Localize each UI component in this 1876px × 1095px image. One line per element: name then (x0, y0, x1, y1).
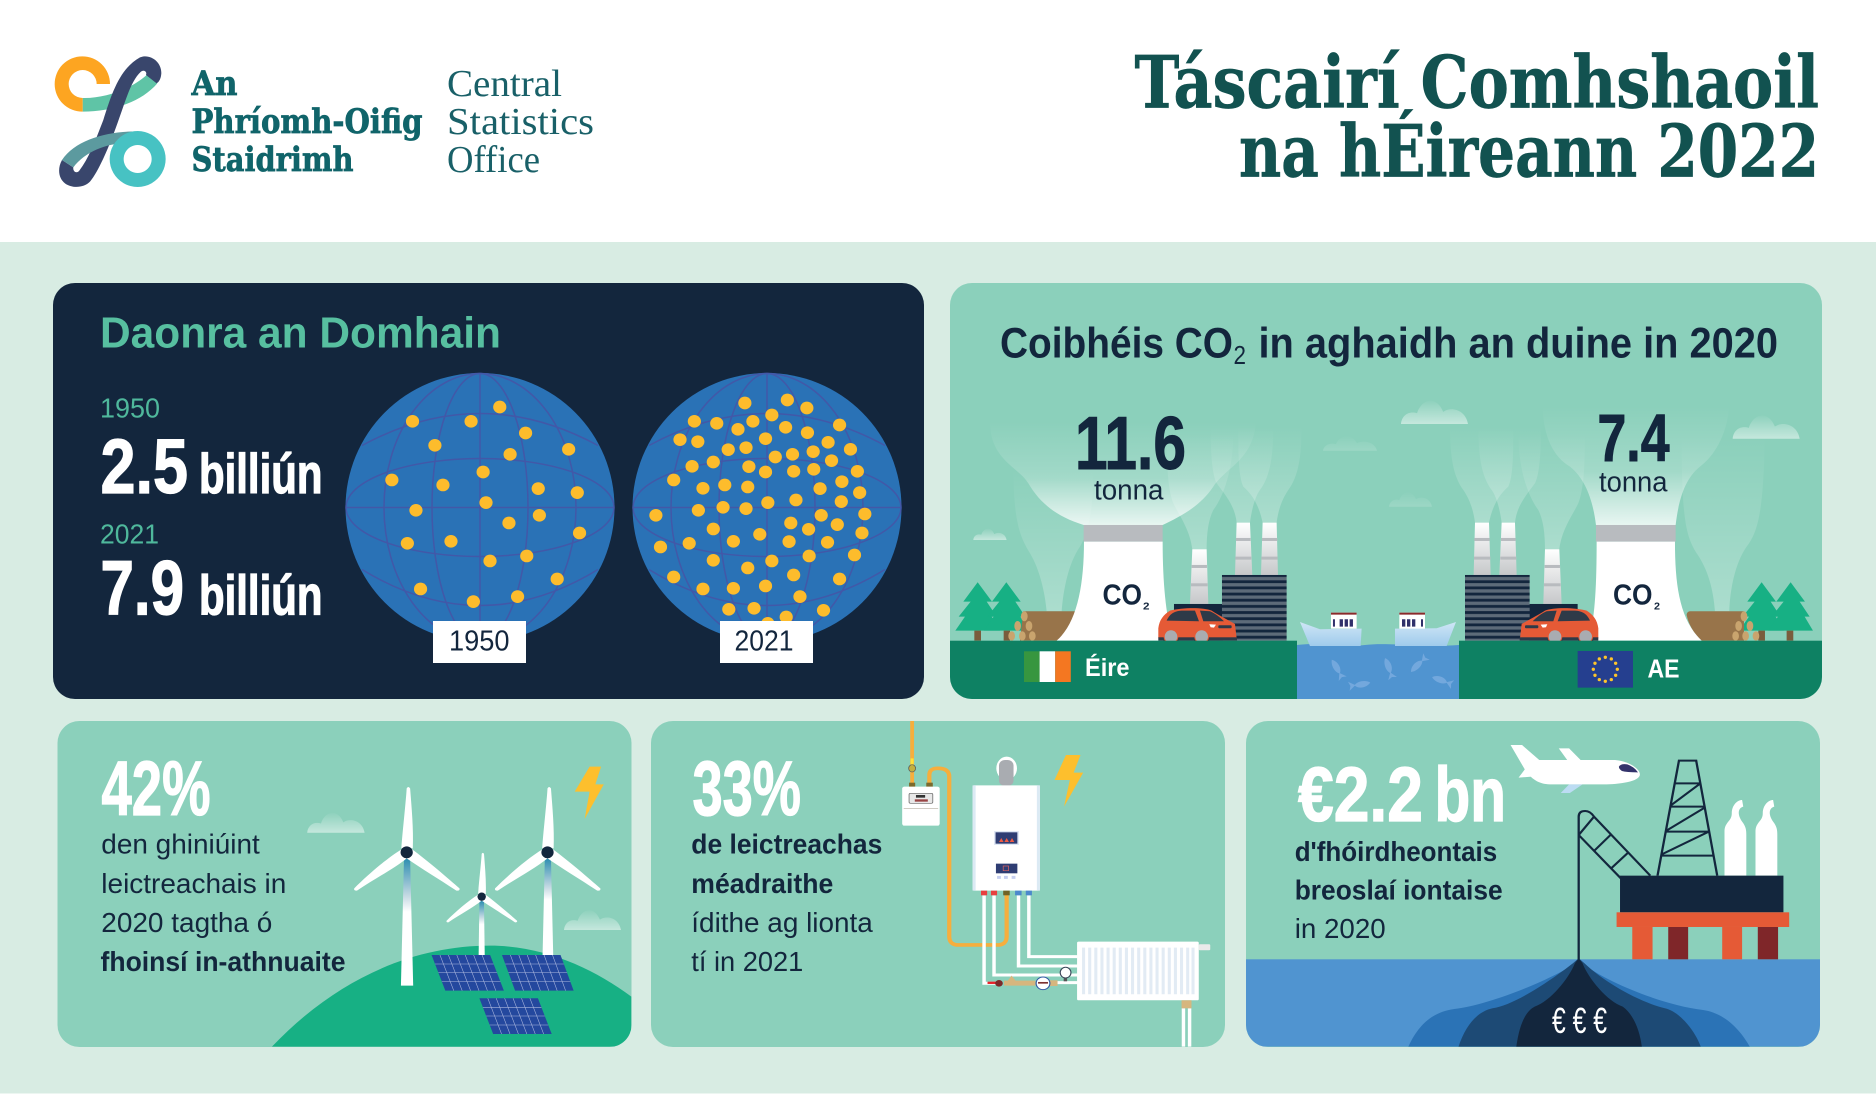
globe 1950 with population dots (346, 373, 614, 642)
stat: EU 7.4 tonnes: 7.4 (1598, 401, 1670, 476)
stat: 2021 population: 2021 (100, 518, 159, 550)
text: subsidies description (1295, 836, 1503, 944)
stat: 33%: 33% (692, 746, 801, 832)
label 2021: 2021 (734, 626, 794, 658)
heading: CO2 per person (1000, 320, 1778, 370)
panel: renewable electricity (58, 721, 632, 1047)
tower label: Ireland CO2: 2 (1143, 602, 1150, 612)
logo text: Irish: Staidrimh (192, 140, 354, 180)
stat: 1950 population: 1950 (100, 392, 160, 424)
scene: EU emissions (1450, 407, 1813, 645)
panel: fossil fuel subsidies (1240, 721, 1840, 1047)
stat: 1950 population: 2.5 (100, 424, 188, 510)
text: renewable description: 2020 tagtha ó (101, 907, 272, 938)
heading: CO2 per person: in aghaidh an duine in 2020 (1258, 320, 1778, 368)
ship: EU side (1395, 613, 1456, 646)
label 1950: 1950 (449, 626, 510, 658)
cloud left (307, 813, 365, 833)
logo text: Irish: Phríomh-Oifig (192, 102, 422, 142)
panel: CO2 per person (950, 283, 1822, 699)
ground: Ireland (950, 641, 1297, 699)
icon: lightning bolt (575, 767, 604, 819)
illustration: sea, oil reserve and oil rig (1240, 761, 1840, 1047)
stat: 2021 population: 7.9 (100, 546, 184, 632)
text: subsidies description: in 2020 (1295, 913, 1386, 944)
heading: CO2 per person: Coibhéis CO (1000, 320, 1233, 368)
ground: EU (1459, 641, 1822, 699)
tower label: EU CO2: CO (1613, 580, 1652, 612)
stat: EU 7.4 tonnes: tonna (1599, 466, 1668, 498)
illustration: hill, turbines and solar panels (272, 787, 631, 1047)
globe 2021 with population dots (632, 373, 902, 642)
label: Ireland: Éire (1085, 653, 1130, 682)
logo text: English (447, 63, 594, 181)
stat: 2.2 bn euro: €2.2 (1298, 752, 1423, 838)
stat: Ireland 11.6 tonnes: tonna (1094, 474, 1164, 506)
logo text: English: Central (447, 63, 562, 105)
text: metered electricity description (691, 828, 882, 977)
ship: Ireland side (1300, 613, 1362, 646)
logo icon (55, 56, 166, 187)
text: subsidies description: d'fhóirdheontais (1295, 836, 1497, 867)
stat: 2021 population (100, 518, 322, 632)
stat: 2.2 bn euro: bn (1434, 752, 1506, 838)
text: renewable description: fhoinsí in-athnuaite (100, 946, 346, 977)
logo text: Irish (191, 64, 422, 180)
title (1134, 40, 1819, 194)
logo text: English: Office (447, 139, 540, 181)
icon: lightning bolt (1054, 755, 1083, 807)
tower label: Ireland CO2: CO (1102, 580, 1142, 612)
tower label: EU CO2: 2 (1654, 602, 1660, 612)
label: EU: AE (1648, 654, 1680, 684)
stat: 2021 population: billiún (199, 564, 322, 626)
logo text: English: Statistics (447, 101, 594, 143)
text: metered electricity description: tí in 2021 (691, 946, 803, 977)
logo text: Irish: An (191, 64, 238, 104)
stat: Ireland 11.6 tonnes: 11.6 (1075, 401, 1186, 485)
label 2021 (720, 621, 813, 663)
scene: water and fish (1297, 644, 1459, 699)
text: renewable description: den ghiniúint (101, 828, 260, 859)
stat: EU 7.4 tonnes (1598, 401, 1670, 498)
panel: world population (53, 283, 924, 699)
panel: metered electricity (651, 721, 1225, 1047)
text: metered electricity description: de leictreachas (691, 828, 882, 859)
stat: Ireland 11.6 tonnes (1075, 401, 1186, 506)
label 1950 (433, 621, 526, 663)
flag: EU (1578, 651, 1633, 688)
euro symbols in oil reserve: € € € (1552, 1000, 1607, 1041)
scene: Ireland emissions (955, 422, 1302, 645)
text: metered electricity description: méadraithe (691, 868, 833, 899)
text: renewable description (100, 828, 346, 977)
flag: Ireland (1024, 651, 1071, 682)
text: subsidies description: breoslaí iontaise (1295, 874, 1503, 905)
text: renewable description: leictreachais in (101, 868, 286, 899)
cloud right (564, 910, 621, 930)
stat: 42%: 42% (102, 746, 210, 832)
scene: clouds (973, 401, 1800, 540)
stat: 1950 population: billiún (199, 442, 322, 505)
icon: aeroplane (1511, 745, 1640, 793)
text: metered electricity description: ídithe ag lionta (691, 907, 873, 938)
heading: world population: Daonra an Domhain (100, 308, 501, 358)
heading: CO2 per person: 2 (1234, 340, 1246, 370)
illustration: gas meter, boiler and radiator (902, 721, 1210, 1047)
stat: 1950 population (100, 392, 322, 510)
